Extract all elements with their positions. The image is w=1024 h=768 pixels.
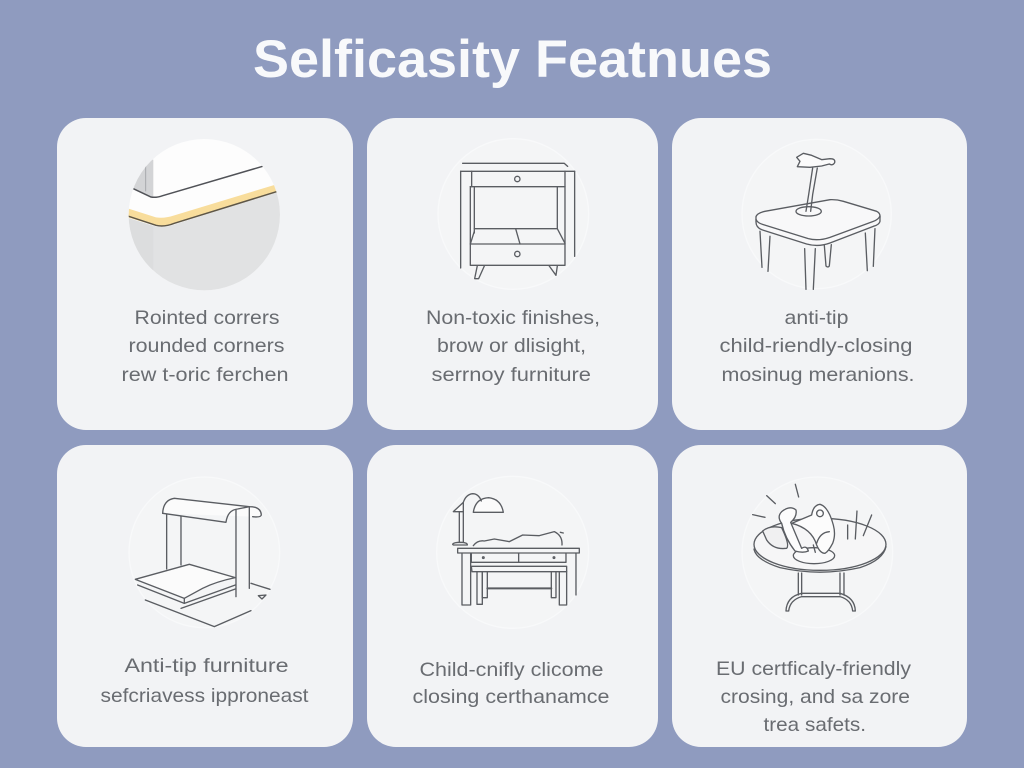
icon: table with lamp (742, 139, 891, 289)
icon: round table with toy (742, 477, 893, 628)
text: card 1: Rointed corrers (134, 307, 280, 329)
panel: anti-tip table (672, 118, 967, 430)
text: card 6 (716, 658, 911, 736)
icon: rounded table corner (128, 139, 280, 290)
text: card 5: Child-cnifly clicome (420, 659, 604, 681)
text: card 4: sefcriavess ipproneast (100, 685, 309, 707)
panel: non-toxic finishes (367, 118, 658, 430)
text: card 2: brow or dlisight, (437, 335, 586, 357)
text: card 2: serrnoy furniture (432, 364, 591, 386)
panel: child-friendly closing (367, 445, 658, 747)
icon: cabinet (438, 139, 589, 289)
panel: EU certified safety (672, 445, 967, 747)
panel: rounded corners (57, 118, 353, 430)
text: card 5 (412, 659, 610, 708)
text: card 2 (426, 307, 600, 386)
text: card 2: Non-toxic finishes, (426, 307, 600, 329)
text: card 3: child-riendly-closing (720, 335, 912, 357)
text: card 1: rounded corners (128, 335, 285, 357)
text: card 6: crosing, and sa zore (720, 686, 910, 708)
text: card 6: trea safets. (764, 714, 866, 736)
icon: desk with lamp (437, 476, 589, 628)
text: card 3 (720, 307, 914, 386)
text: card 6: EU certficaly-friendly (716, 658, 911, 680)
text: card 4 (100, 655, 309, 707)
text: card 3: anti-tip (784, 307, 849, 329)
text: card 1 (122, 307, 288, 386)
text: card 3: mosinug meranions. (722, 364, 914, 386)
icon: frame with mattress (129, 477, 280, 628)
title: Selficasity Featnues (253, 30, 772, 89)
text: card 1: rew t-oric ferchen (122, 364, 288, 386)
panel: anti-tip furniture (57, 445, 353, 747)
text: card 4: Anti-tip furniture (124, 655, 288, 677)
text: card 5: closing certhanamce (412, 686, 610, 708)
